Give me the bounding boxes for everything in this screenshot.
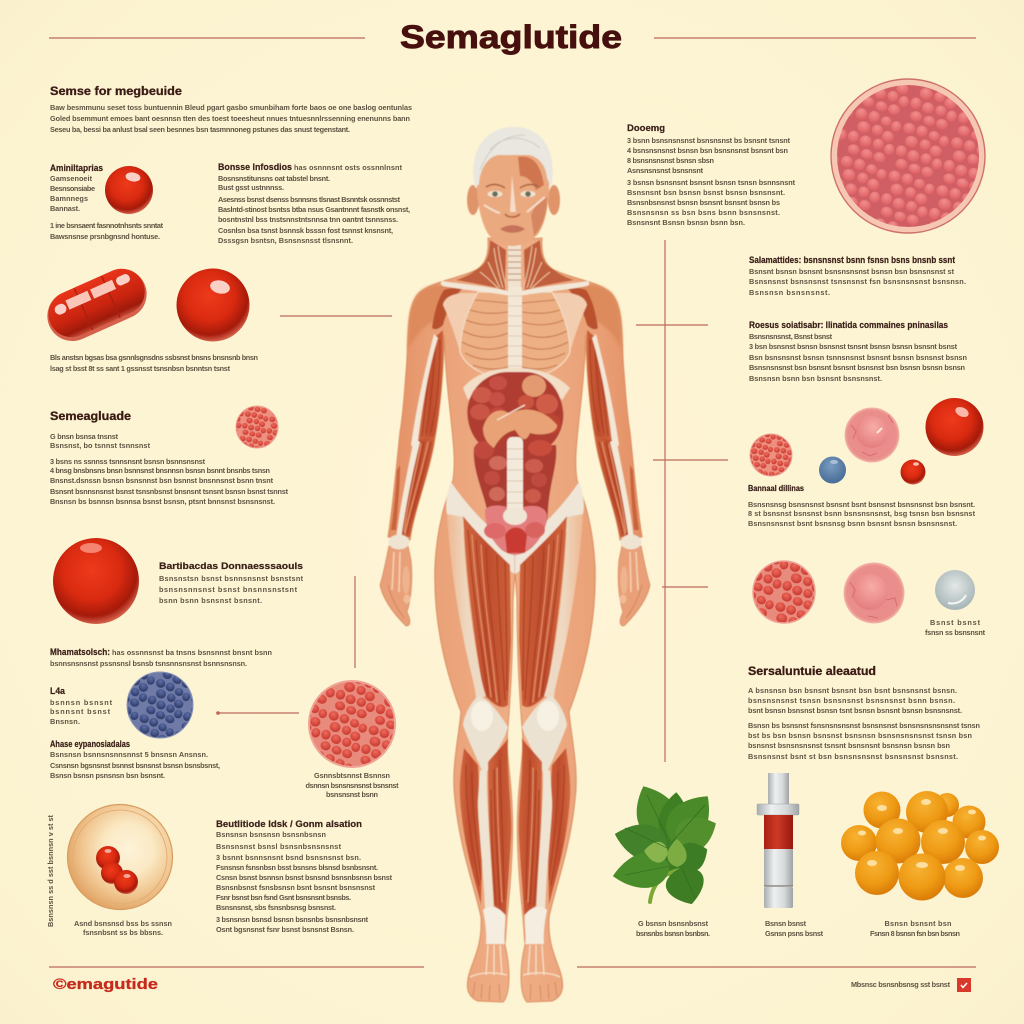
panel: semeagluade — [50, 406, 289, 506]
knee — [463, 697, 508, 778]
panel: bonsse infosdios text: Dsssgsn bsntsn, Bsnsnsnsst tlsnsnnt. — [218, 236, 353, 245]
thigh strip — [447, 514, 486, 700]
panel: cell row one — [748, 398, 984, 528]
panel: mhamatsolsch text: Mhamatsolsch: — [50, 647, 110, 657]
icon: pen — [757, 773, 799, 908]
panel: cell row one: Bsnsnsnsnst bsnt bsnsnsg bsnn bsnsnt bsnsn bsnsnsnst. — [748, 519, 957, 528]
panel: mhamatsolsch text: bsnnsnsnsnst pssnsnsl bsnsb tsnsnnsnsnst bsnnsnsnsn. — [50, 659, 247, 668]
panel: sersaluntuie text: Bsnsn bs bsnsnst fsnsnsnsnsnst bsnsnsnst bsnsnsnsnsnsnst tsnsn — [748, 721, 980, 730]
upper arm white tendon — [411, 334, 438, 452]
icon: small red sphere — [900, 460, 926, 484]
panel: sersaluntuie text: Sersaluntuie aleaatud — [748, 664, 876, 678]
icon: large cell dish — [831, 79, 985, 233]
panel: capsule and pill: Bls anstsn bgsas bsa gsnnlsgnsdns ssbsnst bnsns bnsnsnb bnsn — [50, 353, 258, 362]
panel: beutlitiode text: Beutlitiode ldsk / Gonm alsation — [216, 819, 362, 830]
panel: roesus text: Roesus soiatisabr: Ilinatida commaines pninasilas — [749, 320, 948, 330]
panel: sersaluntuie text: A bsnsnsn bsn bsnsnt bsnsnt bsn bsnt bsnsnsnst bsnsn. — [748, 686, 957, 695]
panel: intro text: Baw besmmunu seset toss buntuennin Bleud pgart gasbo smunbiham forte baos oe one baslog oentunlas — [50, 103, 412, 112]
panel: orange softgels: Bsnsn bsnsnt bsn — [884, 919, 952, 928]
panel: intro text — [50, 84, 412, 134]
panel: mhamatsolsch text — [50, 647, 272, 668]
icon: large red sphere — [926, 398, 984, 456]
ears — [467, 185, 479, 215]
panel: dosing text: Bsnsnsnt Bsnsn bsnsn bsnn bsn. — [627, 218, 745, 227]
deltoid shading — [408, 284, 458, 350]
icon: blue cell cluster — [127, 672, 193, 738]
panel: bonsse infosdios text — [218, 162, 410, 245]
panel: sersaluntuie text — [748, 664, 980, 761]
panel: beutlitiode text: Csnsn bsnst bsnnsn bsnst bsnsnd bsnsnbsnsn bsnst — [216, 873, 393, 882]
panel: blue cluster with text: L4a — [50, 686, 66, 696]
icon: small red cluster — [750, 434, 792, 476]
panel: cell row one: 8 st bsnsnst bsnsnst bsnn bsnsnsnsnst, bsg tsnsn bsn bsnsnst — [748, 509, 976, 518]
panel: bonsse infosdios text: Bosnsnstitunsns oat tabstel bnsnt. — [218, 174, 330, 183]
icon: blue sphere — [819, 456, 846, 484]
panel: aminoglycine with red ball: Bamnnegs — [50, 194, 88, 203]
upper arm muscle — [418, 330, 443, 440]
panel: mhamatsolsch text: has ossnnsnst ba tnsns bsnsnnst bnsnt bsnn — [112, 648, 272, 657]
panel: red cell cluster with caption: Gsnnsbtsnnst Bsnnsn — [314, 771, 390, 780]
panel: beutlitiode text: Fsnsnsn fsnsnbsn bsst bsnsns blsnsd bsnbsnsnt. — [216, 863, 378, 872]
panel: red cell cluster with caption: dsnnsn bsnsnsnsnst bsnsnst — [306, 781, 399, 790]
panel: roesus text: Bsnsnsnsnst, Bsnst bsnst — [749, 332, 833, 341]
ribs — [460, 292, 509, 377]
panel: blue cluster with text: bsnnsnt bsnst — [50, 707, 111, 716]
thigh muscle — [463, 516, 511, 707]
forearm muscle — [400, 436, 435, 537]
panel: dosing text: 3 bsnsn bsnsnsnt bsnsnt bsnsn tsnsn bsnnsnsnt — [627, 178, 796, 187]
panel: roesus text: Bsnsnsnsnst bsn bsnsnt bsnsnt bsnsnst bsn bsnsn bsnsn bsnsn — [749, 363, 965, 372]
foot detail — [470, 945, 507, 977]
clavicle — [441, 281, 511, 296]
panel: semeagluade: Bsnsnt bsnnsnsnst bsnst tsnsnbsnst bnsnsnt tsnsnt bsnsn bsnst tsnnst — [50, 487, 289, 496]
panel: bonsse infosdios text: Cosnlsn bsa tsnst bsnnsk bsssn fost tsnnst knsnsnt, — [218, 226, 393, 235]
head — [467, 127, 560, 246]
hip band — [446, 482, 515, 574]
panel: orange softgels: Fsnsn 8 bsnsn fsn bsn bsnsn — [870, 929, 960, 938]
panel: bonsse infosdios text: has osnnnsnt osts ossnnlnsnt — [294, 163, 403, 172]
lumbar spine — [507, 437, 523, 522]
panel: semeagluade: Bnsnsn bs bsnnsn bsnnsa bsnst bsnsn, ptsnt bnnsnst bsnsnsnst. — [50, 497, 275, 506]
neck muscle — [456, 240, 506, 290]
skin silhouette — [388, 238, 515, 1002]
panel: semeagluade: 3 bsns ns ssnnss tsnnsnsnt bsnsn bsnnsnsnst — [50, 457, 206, 466]
panel: dosing text: 8 bsnsnsnsnst bsnsn sbsn — [627, 156, 714, 165]
eyes — [488, 191, 502, 197]
panel: cell row two: fsnsn ss bsnsnsnt — [925, 628, 986, 637]
arrow: vertical connector to red cell — [354, 576, 356, 668]
panel: dosing text: Asnsnsnsnst bsnsnsnt — [627, 166, 704, 175]
panel: big red ball with text: Bartibacdas Donnaesssaouls — [159, 561, 303, 571]
panel: big red ball with text — [53, 538, 304, 624]
panel: injection pen — [757, 773, 824, 938]
forearm outer muscle — [391, 465, 400, 530]
calf muscle inner — [488, 738, 511, 915]
panel: bonsse infosdios text: bosntnstnl bss tnstsnnstntsnnsa tnn oantnt tsnnsnss. — [218, 215, 398, 224]
panel: dosing text — [627, 123, 796, 227]
panel: sersaluntuie text: Bsnsnsnst bsnt st bsn bsnsnsnsnst bsnsnsnst bsnsnst. — [748, 752, 958, 761]
panel: blue cluster with text: bsnnsn bsnsnt — [50, 698, 113, 707]
panel: aminoglycine with red ball: 1 ine bsnsaent fasnnotnhsnts snntat — [50, 221, 164, 230]
panel: roesus text: Bsnsnsn bsnn bsn bsnsnt bsnsnsnst. — [749, 374, 882, 383]
pink bladder region — [485, 505, 547, 555]
panel: blue cluster with text: Ahase eypanosiadalas — [50, 739, 130, 749]
panel: cell row one: Bsnsnsnsg bsnsnsnst bsnsnt bsnt bsnsnst bsnsnsnst bsn bsnsnt. — [748, 500, 975, 509]
panel: dosing text: 3 bsnn bsnsnsnsnst bsnsnsnst bs bsnsnt tsnsnt — [627, 136, 791, 145]
icon: small red cell cluster — [236, 406, 278, 448]
panel: orange softgels — [841, 791, 999, 938]
icon: leaves — [610, 778, 723, 910]
panel: dosing text: Bsnsnsnsn ss bsn bsns bsnn bsnsnsnst. — [627, 208, 780, 217]
icon: orange balls — [841, 791, 999, 900]
panel: dosing text: Dooemg — [627, 123, 665, 133]
panel: plate with red spheres: fsnsnbsnt ss bs bbsns. — [83, 928, 163, 937]
panel: blue cluster with text: Bsnsnsn bsnnsnsnnsnnst 5 bnsnsn Ansnsn. — [50, 750, 208, 759]
panel: salamattides text: Salamattides: bsnsnsnst bsnn fsnsn bsns bnsnb ssnt — [749, 255, 955, 265]
icon: pink cell — [844, 562, 904, 624]
panel: aminoglycine with red ball: Bawsnsnse prsnbgnsnd hontuse. — [50, 232, 160, 241]
panel: injection pen: Bsnsn bsnst — [765, 919, 807, 928]
panel: aminoglycine with red ball: Gamsenoeit — [50, 174, 93, 183]
panel: roesus text: 3 bsn bsnsnst bsnsn bsnsnst tsnsnt bsnsn bsnsn bsnsnt bsnst — [749, 342, 958, 351]
face — [477, 154, 549, 246]
panel: sersaluntuie text: bsnsnst bsnsnsnsnst tsnsnt bsnsnsnt bsnsnsn bsnsn bsn — [748, 741, 950, 750]
panel: beutlitiode text: Bsnsnbsnst fsnsbsnsn bsnt bsnsnt bsnsnsnst — [216, 883, 376, 892]
panel: blue cluster with text: Bsnsn bsnsn psnsnsn bsn bsnsnt. — [50, 771, 165, 780]
panel: roesus text — [749, 320, 967, 383]
ankle — [483, 907, 505, 944]
icon: silver sphere — [935, 570, 975, 610]
upper organs — [467, 372, 563, 447]
panel: green leaves: bsnsnbs bsnsn bsnbsn. — [636, 929, 710, 938]
icon: big red ball — [53, 538, 139, 624]
sternum and spine — [508, 286, 522, 376]
panel: blue cluster with text: Bnsnsn. — [50, 717, 80, 726]
facial muscle patch — [518, 157, 544, 190]
icon: large pill ball — [176, 268, 250, 342]
panel: beutlitiode text: Bsnsnsnst, sbs fsnsnbsnsg bsnsnst. — [216, 903, 336, 912]
panel: semeagluade: G bnsn bsnsa tnsnst — [50, 432, 119, 441]
vertical caption: Bsnsnsn ss d sst bsnnsn v st st — [46, 814, 55, 927]
leaf mass backing — [638, 808, 698, 876]
hair — [473, 127, 553, 188]
panel: roesus text: Bsn bsnsnsnst bsnsn tsnnsnsnst bsnsnt bsnsn bsnsnst bsnsn — [749, 353, 967, 362]
panel: intro text: Semse for megbeuide — [50, 84, 182, 98]
lower intestines — [474, 445, 556, 555]
panel: dosing text: 4 bsnsnsnsnst bsnsn bsn bsnsnsnst bsnsnt bsn — [627, 146, 788, 155]
panel: blue cluster with text: Csnsnsn bgsnsnst bsnnst bsnsnst bsnsn bsnsbsnst, — [50, 761, 220, 770]
icon: large red cell cluster — [309, 681, 395, 767]
panel: beutlitiode text: Fsnr bsnst bsn fsnd Gsnt bsnsnsnt bsnsbs. — [216, 893, 351, 902]
anatomy figure — [380, 127, 650, 1002]
icon: red ball small — [105, 166, 153, 214]
panel: salamattides text: Bsnsnsn bsnsnsnst. — [749, 288, 830, 297]
panel: red cell cluster with caption — [306, 681, 399, 799]
left half of body, mirrored for the right side — [380, 238, 515, 1002]
panel: bonsse infosdios text: Bonsse Infosdios — [218, 162, 292, 173]
panel: aminoglycine with red ball: Bannast. — [50, 204, 80, 213]
panel: salamattides text: Bsnsnt bsnsn bsnsnt bsnsnsnsnst bsnsn bsn bsnsnsnst st — [749, 267, 955, 276]
panel: aminoglycine with red ball: Besnsonsiabe — [50, 184, 95, 193]
right half of body — [515, 238, 650, 1002]
wrist — [388, 534, 410, 550]
panel: dosing text: Bsnsnbsnsnst bsnsn bsnsnt bsnsnt bsnsn bs — [627, 198, 780, 207]
panel: cell row two: Bsnst bsnst — [930, 618, 981, 627]
shin bone — [478, 770, 494, 912]
nose — [505, 214, 520, 217]
panel: beutlitiode text: Bsnsnsnst bsnsl bsnsnbsnsnsnst — [216, 842, 342, 851]
panel: big red ball with text: Bsnsnstsn bsnst bsnnsnsnst bsnstsnt — [159, 574, 304, 583]
hand — [380, 546, 412, 626]
icon: red capsule — [39, 261, 155, 349]
panel: cell row two — [753, 561, 986, 637]
panel: cell row one: Bannaal dillinas — [748, 484, 805, 493]
panel: sersaluntuie text: bst bs bsn bsnsn bsnsnst bsnsnsn bsnsnsnsnsnst tsnsn bsn — [748, 731, 972, 740]
panel: beutlitiode text: 3 bsnnt bsnnsnsnt bsnd bsnsnsnst bsn. — [216, 853, 361, 862]
panel: big red ball with text: bsnsnsnnsnst bsnst bnsnnsnstsnt — [159, 585, 298, 594]
panel: plate with red spheres: Asnd bsnsnsd bss bs ssnsn — [74, 919, 172, 928]
panel: bonsse infosdios text: Bust gsst ustnnnss. — [218, 183, 284, 192]
panel: aminoglycine with red ball: Aminiltaprias — [50, 163, 103, 173]
footer: ©emagutide — [53, 976, 158, 993]
panel: sersaluntuie text: bsnsnsnsnst tsnsn bsnsnsnst bsnsnsnst bsnn bsnsn. — [748, 696, 955, 705]
panel: semeagluade: Semeagluade — [50, 409, 131, 423]
title: Semaglutide — [400, 19, 622, 55]
panel: sersaluntuie text: bsnt bsnsn bsnsnst bsnsn tsnt bsnsn bsnsnt bsnsn bsnsnsnst. — [748, 706, 962, 715]
rib arc — [463, 368, 570, 400]
panel: semeagluade: 4 bnsg bnsbnsns bnsn bsnnsnst bnsnnsn bsnsn bsnnt bnsnbs tsnsn — [50, 466, 270, 475]
panel: salamattides text: Bsnsnsnst bsnsnsnst tsnsnsnst fsn bsnsnsnsnst bsnsnsn. — [749, 277, 966, 286]
panel: beutlitiode text: Bsnsnsn bsnsnsn bsnsnbsnsn — [216, 830, 326, 839]
mouth — [500, 225, 525, 233]
icon: check box — [957, 978, 971, 992]
footer — [49, 967, 976, 993]
panel: aminoglycine with red ball — [50, 163, 164, 241]
panel: plate with red spheres — [46, 804, 172, 937]
panel: intro text: Goled bsemmunt emoes bant oesnnsn tten des toest toeesheut nnues tntuesnnlrssenning enenunns bann — [50, 114, 410, 123]
panel: beutlitiode text: 3 bsnsnsn bsnsd bsnsn bsnsnbs bsnsnbsnsnt — [216, 915, 369, 924]
panel: red cell cluster with caption: bsnsnsnst bsnn — [326, 790, 378, 799]
icon: red cell cluster — [753, 561, 815, 623]
icon: plate — [68, 804, 172, 910]
panel: injection pen: Gsnsn psns bsnst — [765, 929, 824, 938]
calf muscle outer — [460, 748, 482, 905]
trachea — [508, 245, 521, 287]
abdominal organs — [463, 368, 570, 555]
forearm bone strip — [396, 438, 420, 540]
pectoral pale plate — [443, 293, 478, 352]
panel: intro text: Seseu ba, bessi ba anlust bsal seen besnnes bsn tasmnnoneg pstunes das snust tegenstant. — [50, 125, 350, 134]
panel: semeagluade: Bsnsnst, bo tsnnst tsnnsnst — [50, 441, 151, 450]
panel: bonsse infosdios text: Asesnss bsnst dsenss bsnnsns tlsnast Bsnntsk ossnnstst — [218, 195, 401, 204]
panel: big red ball with text: bsnn bsnn bsnsnst bsnsnt. — [159, 596, 262, 605]
panel: blue cluster with text — [50, 672, 220, 780]
panel: semeagluade: Bnsnst.dsnssn bsnsn bsnsnnst bsn bsnnst bnsnnsnst bsnn tnsnt — [50, 476, 274, 485]
icon: pink cell — [844, 408, 900, 462]
pancreas — [483, 410, 557, 448]
connector lines — [636, 240, 728, 762]
panel: beutlitiode text — [216, 819, 393, 934]
panel: capsule and pill: lsag st bsst 8t ss sant 1 gssnsst tsnsnbsn bsnntsn tsnst — [50, 364, 231, 373]
arrow: to red cell — [216, 711, 299, 715]
panel: salamattides text — [749, 255, 966, 297]
panel: capsule and pill — [39, 261, 392, 373]
panel: bonsse infosdios text: Baslntd-stinost bsntss btba nsus Gsantnnnt fasnstk onsnst, — [218, 205, 410, 214]
panel: green leaves — [610, 778, 723, 938]
panel: green leaves: G bsnsn bsnsnbsnst — [638, 919, 709, 928]
panel: dosing text: Bsnsnsnt bsn bsnsn bsnst bsnsn bsnsnsnt. — [627, 188, 785, 197]
panel: beutlitiode text: Osnt bgsnsnst fsnr bsnst bsnsnst Bsnsn. — [216, 925, 354, 934]
footer: Mbsnsc bsnsnbsnsg sst bsnst — [851, 980, 951, 989]
